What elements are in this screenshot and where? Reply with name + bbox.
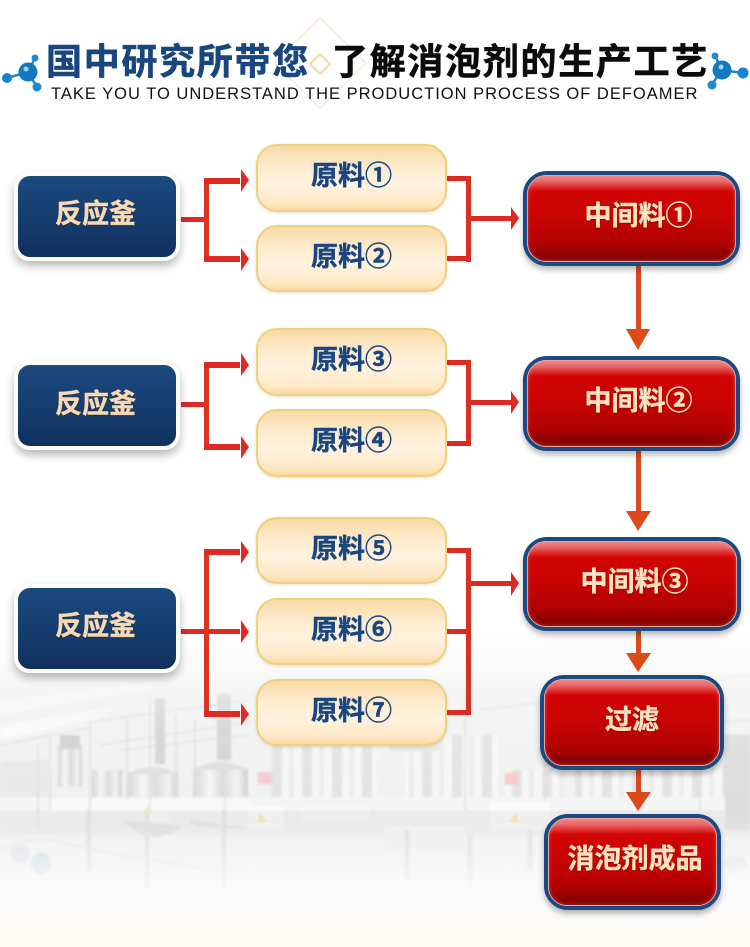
icon: title diamond (308, 52, 332, 76)
intermediate box 3: 中间料③ (580, 567, 688, 597)
reactor box 3: 反应釜 (55, 611, 136, 641)
material box 3 (256, 328, 447, 396)
material box 1: 原料① (311, 161, 392, 191)
material box 4 (256, 409, 447, 477)
filtration box (540, 675, 724, 770)
arrow: intermediate 1 to intermediate 2 (626, 266, 650, 350)
material box 7: 原料⑦ (311, 696, 392, 726)
reactor box 2 (14, 361, 180, 450)
arrow: filtration to finished product (626, 770, 651, 811)
arrow: intermediate 2 to intermediate 3 (626, 451, 651, 531)
connector: materials 5, 6, 7 to intermediate 3 (447, 548, 519, 715)
arrow: intermediate 3 to filtration (626, 631, 651, 672)
material box 1 (256, 144, 447, 212)
under-deck band (150, 812, 551, 830)
reactor box 3 (14, 584, 180, 673)
motors (10, 845, 30, 863)
material box 6 (256, 598, 447, 665)
legs (87, 810, 532, 868)
icon: right molecule (708, 52, 748, 90)
red labels (258, 772, 272, 784)
intermediate box 2: 中间料② (584, 386, 692, 416)
reactor box 1 (14, 172, 180, 261)
connector: materials 3 and 4 to intermediate 2 (447, 360, 519, 446)
finished product box (544, 814, 721, 910)
connector: reactor 1 to materials 1 and 2 (181, 169, 249, 271)
reactor box 1: 反应釜 (55, 199, 136, 229)
material box 5: 原料⑤ (311, 534, 392, 564)
material box 3: 原料③ (311, 345, 392, 375)
intermediate box 3 (523, 537, 741, 631)
frames (2, 712, 701, 810)
left small vessels (58, 745, 82, 787)
title right part: 了解消泡剂的生产工艺 (332, 41, 709, 82)
intermediate box 1 (523, 171, 740, 266)
material box 5 (256, 517, 447, 584)
material box 7 (256, 679, 447, 746)
intermediate box 2 (523, 356, 740, 451)
reactor box 2: 反应釜 (55, 389, 136, 419)
material box 2: 原料② (311, 242, 392, 272)
connector: reactor 3 to materials 5, 6, 7 (181, 541, 249, 726)
platforms (92, 796, 725, 806)
connector: materials 1 and 2 to intermediate 1 (447, 176, 519, 262)
english subtitle: TAKE YOU TO UNDERSTAND THE PRODUCTION PROCESS OF DEFOAMER (51, 85, 698, 103)
material box 6: 原料⑥ (311, 615, 392, 645)
ceiling streaks (0, 680, 170, 740)
connector: reactor 2 to materials 3 and 4 (181, 353, 249, 459)
material box 2 (256, 225, 447, 292)
icon: left molecule (2, 54, 42, 92)
intermediate box 1: 中间料① (584, 201, 692, 231)
title left part: 国中研究所带您 (46, 41, 310, 82)
material box 4: 原料④ (311, 426, 392, 456)
filtration box: 过滤 (605, 705, 659, 735)
dark columns (155, 698, 165, 764)
background: faded factory photo (0, 674, 750, 947)
large vessels centre (272, 746, 372, 797)
finished product box: 消泡剂成品 (568, 844, 702, 874)
faint warning labels (144, 805, 520, 822)
title (46, 41, 709, 103)
